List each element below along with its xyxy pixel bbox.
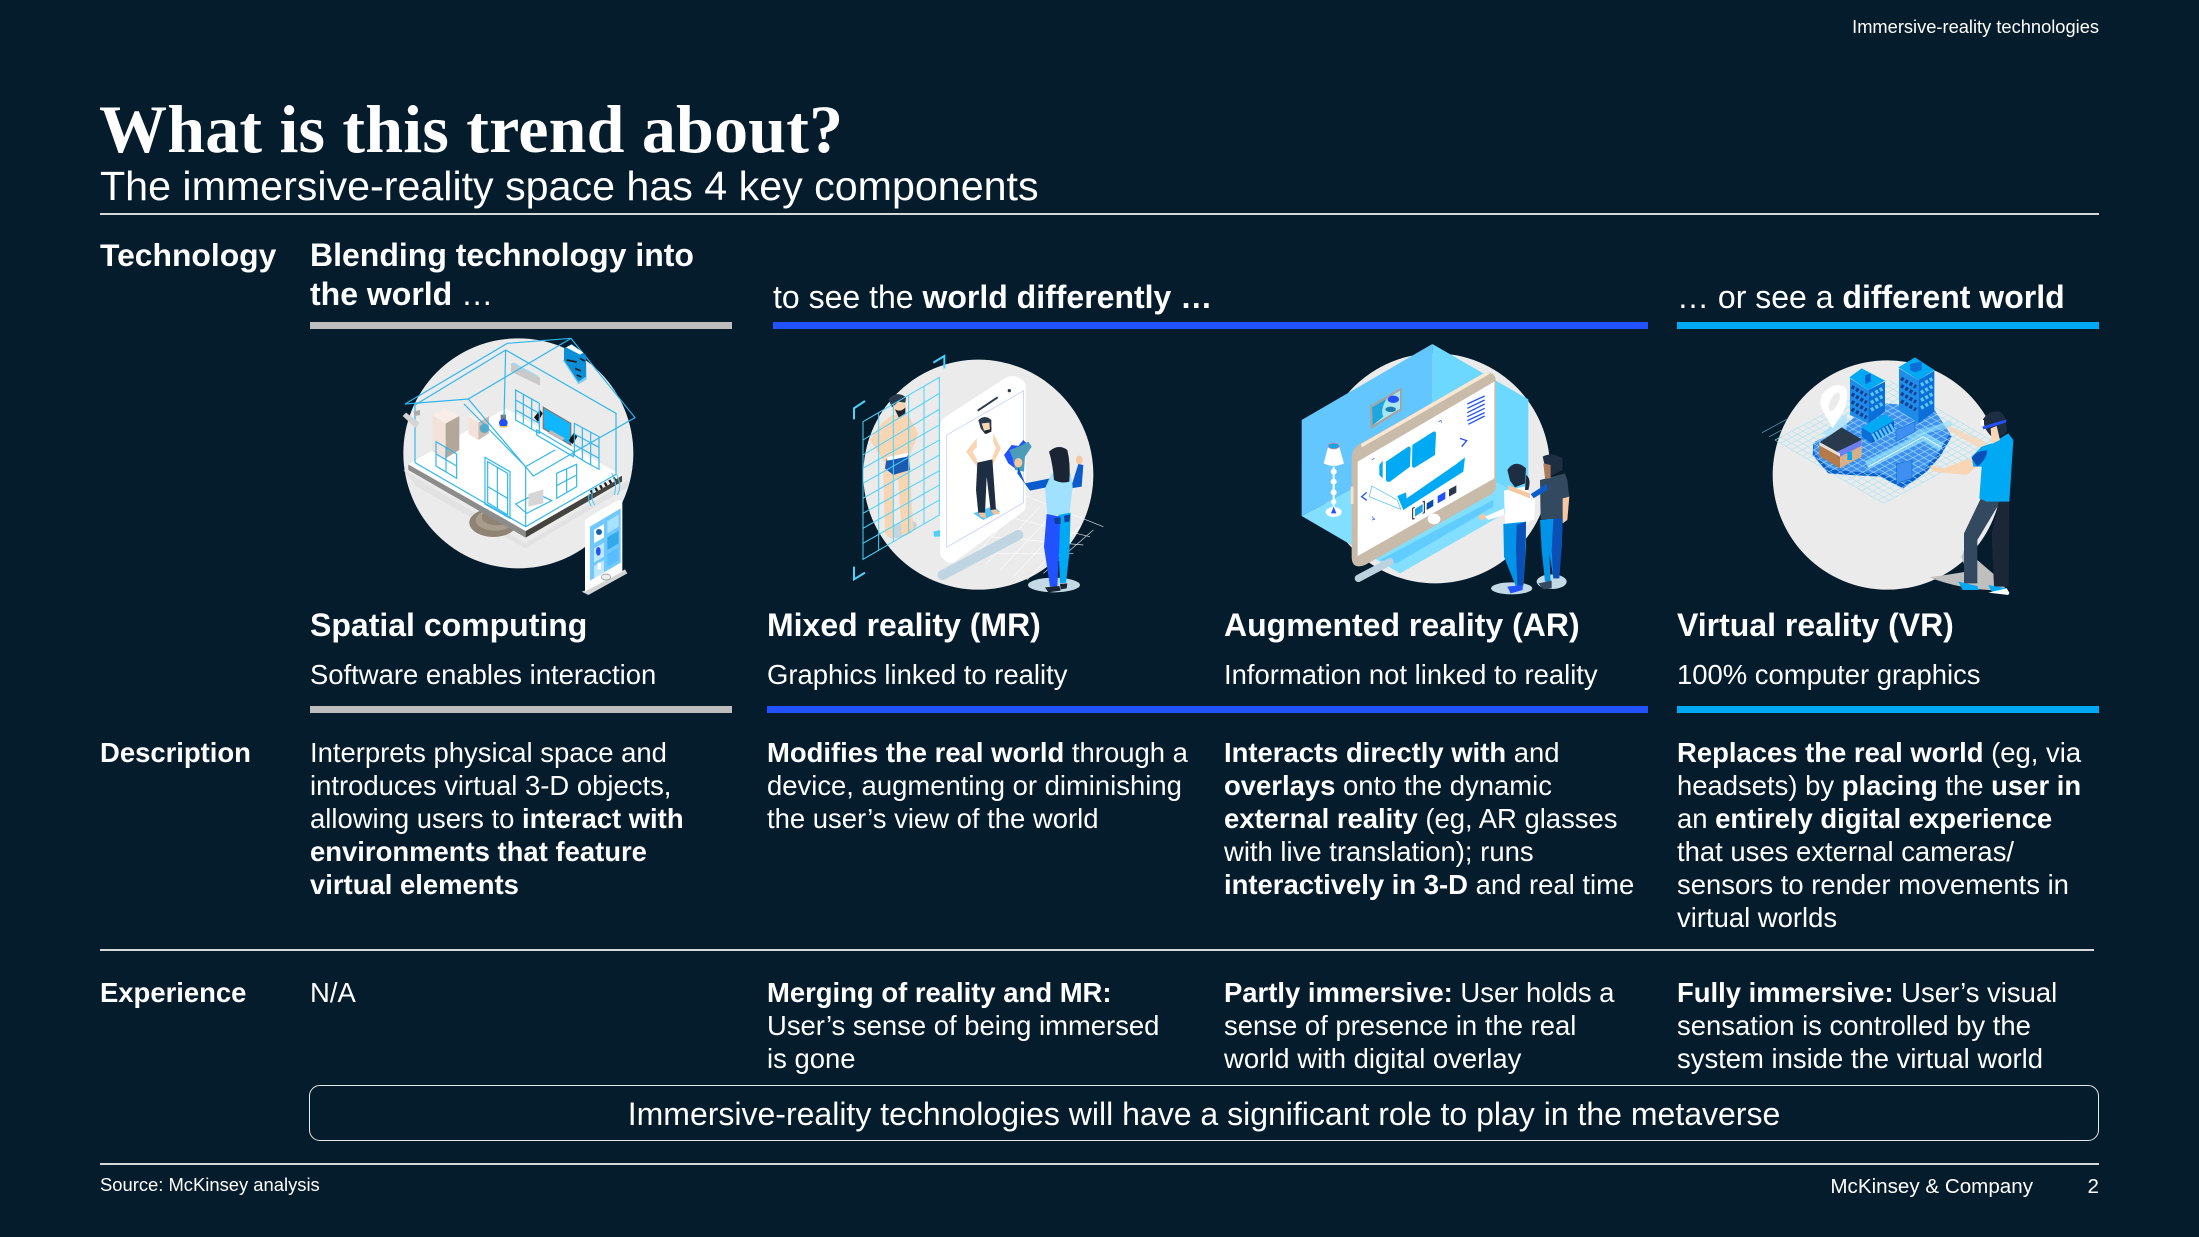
callout <box>309 1085 2099 1141</box>
wireframe house <box>405 338 635 527</box>
description: spatial computing <box>310 737 684 900</box>
description: spatial computing: environments that feature <box>310 836 647 867</box>
description: virtual reality: virtual worlds <box>1677 902 1837 933</box>
mid bar: blue category <box>767 706 1648 713</box>
experience: mixed reality <box>767 977 1159 1074</box>
row label: description: Description <box>100 737 251 768</box>
illustration: mixed reality <box>853 354 1104 592</box>
description: augmented reality <box>1224 737 1634 900</box>
hub with signal waves <box>589 473 620 506</box>
woman <box>1014 447 1083 592</box>
security camera <box>403 410 420 428</box>
pedestal <box>469 508 517 537</box>
desk monitor <box>528 489 543 507</box>
experience: virtual reality: Fully immersive: User’s visual <box>1677 977 2057 1008</box>
description: mixed reality: device, augmenting or diminishing <box>767 770 1182 801</box>
virtual man <box>966 417 1001 520</box>
row label: experience: Experience <box>100 977 246 1008</box>
description: augmented reality: external reality (eg, AR glasses <box>1224 803 1617 834</box>
man with headset <box>1929 411 2013 595</box>
experience: augmented reality: world with digital overlay <box>1224 1043 1521 1074</box>
subtitle: The immersive-reality space has 4 key components <box>100 163 1039 209</box>
description: virtual reality: an entirely digital experience <box>1677 803 2052 834</box>
top bar: blue category <box>773 322 1648 329</box>
sofa on screen <box>1369 432 1465 510</box>
description: spatial computing: virtual elements <box>310 869 519 900</box>
description: mixed reality: Modifies the real world through a <box>767 737 1188 768</box>
location pin <box>1820 385 1847 440</box>
smartphone <box>582 500 627 595</box>
illustration: augmented reality <box>1302 344 1570 594</box>
experience: virtual reality <box>1677 977 2057 1074</box>
category heading: blending technology: the world … <box>310 276 493 312</box>
air conditioner <box>511 363 540 386</box>
description: spatial computing: introduces virtual 3-D objects, <box>310 770 671 801</box>
tall buildings <box>1849 357 1934 483</box>
description: augmented reality: with live translation); runs <box>1224 836 1534 867</box>
floor lamp <box>1324 443 1344 517</box>
experience: augmented reality: sense of presence in the real <box>1224 1010 1576 1041</box>
experience: virtual reality: system inside the virtual world <box>1677 1043 2043 1074</box>
tablet <box>1351 373 1496 566</box>
scan corner brackets <box>854 356 944 579</box>
description: virtual reality: that uses external cameras/ <box>1677 836 2014 867</box>
section tag: Immersive-reality technologies <box>1852 16 2099 37</box>
fridge <box>432 408 459 460</box>
washing machine <box>468 412 489 440</box>
digital map <box>1813 403 1952 488</box>
technology name: mixed reality: Mixed reality (MR) <box>767 607 1041 643</box>
description: spatial computing: Interprets physical space and <box>310 737 667 768</box>
shop <box>1819 427 1862 468</box>
mid bar: cyan category <box>1677 706 2099 713</box>
experience: mixed reality: is gone <box>767 1043 855 1074</box>
real man <box>870 394 919 542</box>
illustration: spatial computing smart home <box>402 338 636 595</box>
description: virtual reality: headsets) by placing the user in <box>1677 770 2081 801</box>
description: virtual reality <box>1677 737 2082 933</box>
illustration: virtual reality <box>1762 357 2014 595</box>
experience: spatial computing: N/A <box>310 977 356 1008</box>
mid bar: grey category <box>310 706 732 713</box>
category heading: see the world differently: to see the world differently … <box>773 279 1212 315</box>
tagline: augmented reality: Information not linked to reality <box>1224 659 1598 690</box>
TV <box>534 407 577 445</box>
category heading: see a different world: … or see a different world <box>1677 279 2065 315</box>
grid overlay <box>1775 380 1997 503</box>
description: mixed reality <box>767 737 1188 834</box>
experience: augmented reality: Partly immersive: User holds a <box>1224 977 1614 1008</box>
phone <box>933 376 1026 563</box>
tagline: spatial computing: Software enables interaction <box>310 659 656 690</box>
category heading: blending technology <box>310 237 694 312</box>
title: What is this trend about? <box>99 91 843 167</box>
tagline: virtual reality: 100% computer graphics <box>1677 659 1981 690</box>
brand footer: McKinsey & Company <box>1830 1175 2033 1198</box>
motion lines <box>1762 419 1787 440</box>
description: augmented reality: overlays onto the dynamic <box>1224 770 1552 801</box>
floor grid <box>973 495 1103 580</box>
technology name: augmented reality: Augmented reality (AR) <box>1224 607 1580 643</box>
room walls <box>1302 344 1528 578</box>
virtual shirt <box>1004 440 1032 472</box>
technology name: virtual reality: Virtual reality (VR) <box>1677 607 1954 643</box>
screen icons <box>1362 396 1485 520</box>
wall picture <box>1370 387 1402 429</box>
experience: mixed reality: Merging of reality and MR: <box>767 977 1112 1008</box>
router <box>563 344 587 384</box>
callout: Immersive-reality technologies will have a significant role to play in the metaverse <box>628 1096 1780 1132</box>
phone floor shadow <box>943 535 1018 575</box>
scan grid <box>863 377 939 559</box>
description: spatial computing: allowing users to interact with <box>310 803 684 834</box>
description: mixed reality: the user’s view of the world <box>767 803 1098 834</box>
page number: 2 <box>2088 1175 2099 1198</box>
smart bulb <box>499 415 508 427</box>
category heading: blending technology: Blending technology into <box>310 237 694 273</box>
source note: Source: McKinsey analysis <box>100 1174 320 1195</box>
tagline: mixed reality: Graphics linked to reality <box>767 659 1067 690</box>
row label: technology: Technology <box>100 237 276 273</box>
experience: augmented reality <box>1224 977 1614 1074</box>
description: virtual reality: sensors to render movements in <box>1677 869 2069 900</box>
top bar: grey category <box>310 322 732 329</box>
couple <box>1479 455 1569 594</box>
description: augmented reality: Interacts directly with and <box>1224 737 1560 768</box>
experience: virtual reality: sensation is controlled by the <box>1677 1010 2031 1041</box>
floor slab <box>408 408 622 538</box>
description: augmented reality: interactively in 3-D and real time <box>1224 869 1634 900</box>
technology name: spatial computing: Spatial computing <box>310 607 587 643</box>
description: virtual reality: Replaces the real world (eg, via <box>1677 737 2081 768</box>
experience: mixed reality: User’s sense of being immersed <box>767 1010 1159 1041</box>
top bar: cyan category <box>1677 322 2099 329</box>
